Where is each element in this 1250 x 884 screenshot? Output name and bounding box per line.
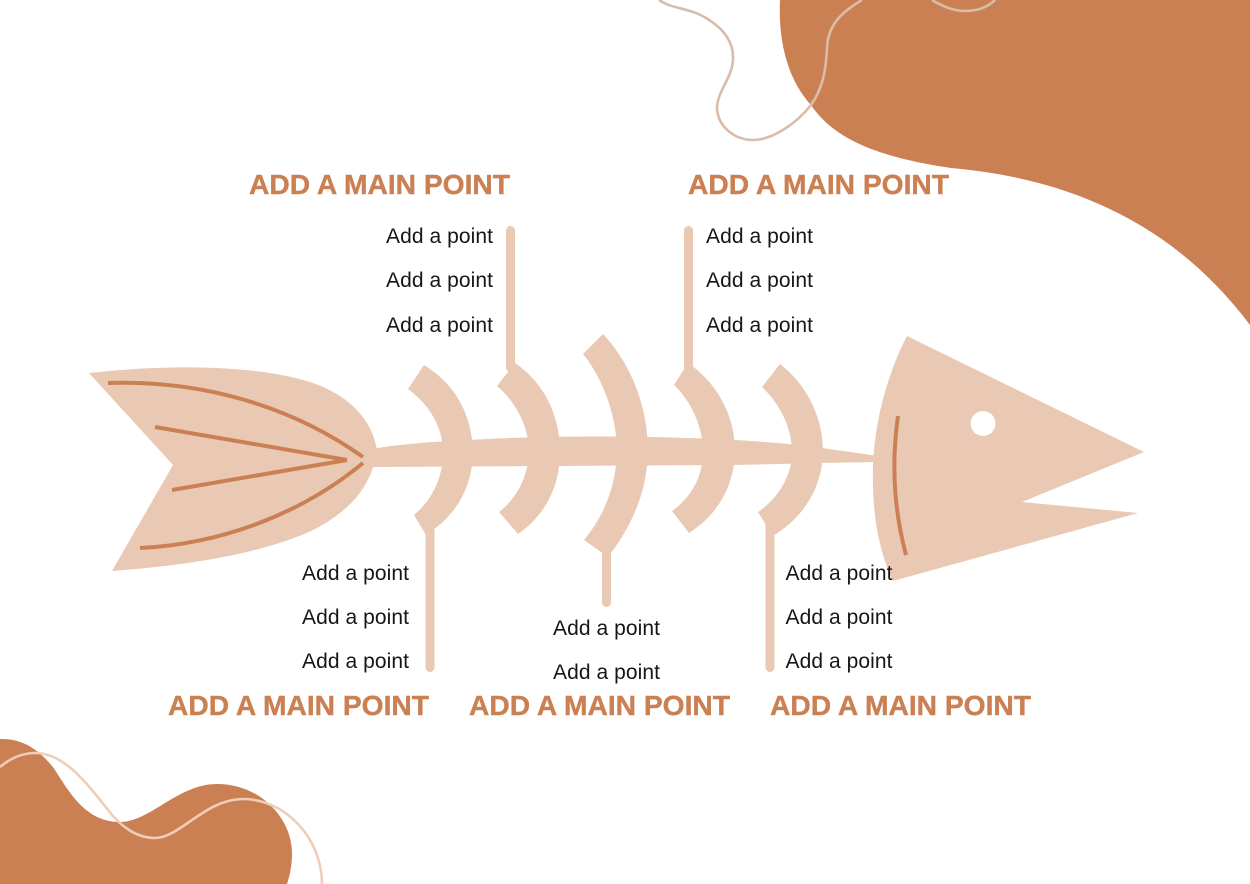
- points: bottom left: Add a point: [302, 562, 409, 585]
- cause group: bottom left: [168, 562, 429, 721]
- tail fin rays: [108, 383, 363, 548]
- cause group: top right: [688, 169, 949, 337]
- rib 3: [583, 334, 648, 557]
- rib 4: [672, 363, 735, 533]
- cause group: bottom centre: [469, 617, 730, 721]
- points: top left: [386, 225, 493, 337]
- rib 5: [758, 364, 823, 536]
- connector: bottom centre: [602, 550, 611, 607]
- gill line: [894, 416, 906, 555]
- points: bottom centre: Add a point: [553, 617, 660, 640]
- spine: [372, 437, 878, 467]
- heading: bottom left: ADD A MAIN POINT: [168, 690, 429, 721]
- fish tail: [89, 367, 377, 571]
- points: top right: [706, 225, 813, 337]
- points: top left: Add a point: [386, 269, 493, 292]
- rib 1: [408, 365, 473, 535]
- fish skeleton: [89, 334, 1144, 581]
- connector: top left: [506, 226, 515, 372]
- points: top left: Add a point: [386, 314, 493, 337]
- points: bottom left: Add a point: [302, 606, 409, 629]
- connector: bottom right: [766, 520, 774, 672]
- top right blob: [780, 0, 1250, 325]
- points: bottom centre: [553, 617, 660, 684]
- points: bottom left: [302, 562, 409, 673]
- heading: top right: ADD A MAIN POINT: [688, 169, 949, 200]
- connector: bottom left: [426, 525, 434, 672]
- points: bottom centre: Add a point: [553, 661, 660, 684]
- rib 2: [497, 363, 560, 534]
- cause group: bottom right: [770, 562, 1031, 721]
- heading: bottom right: ADD A MAIN POINT: [770, 690, 1031, 721]
- points: top right: Add a point: [706, 225, 813, 248]
- cause group: top left: [249, 169, 510, 337]
- points: bottom right: Add a point: [786, 606, 893, 629]
- points: bottom right: Add a point: [786, 650, 893, 673]
- points: bottom right: Add a point: [786, 562, 893, 585]
- connector: top right: [684, 226, 693, 372]
- points: bottom right: [786, 562, 893, 673]
- top squiggle line: [659, 0, 995, 140]
- points: bottom left: Add a point: [302, 650, 409, 673]
- bottom left blob: [0, 739, 292, 884]
- points: top left: Add a point: [386, 225, 493, 248]
- heading: top left: ADD A MAIN POINT: [249, 169, 510, 200]
- points: top right: Add a point: [706, 314, 813, 337]
- fish head: [873, 336, 1144, 581]
- heading: bottom centre: ADD A MAIN POINT: [469, 690, 730, 721]
- fish eye: [970, 411, 996, 436]
- points: top right: Add a point: [706, 269, 813, 292]
- bottom squiggle line: [0, 753, 322, 884]
